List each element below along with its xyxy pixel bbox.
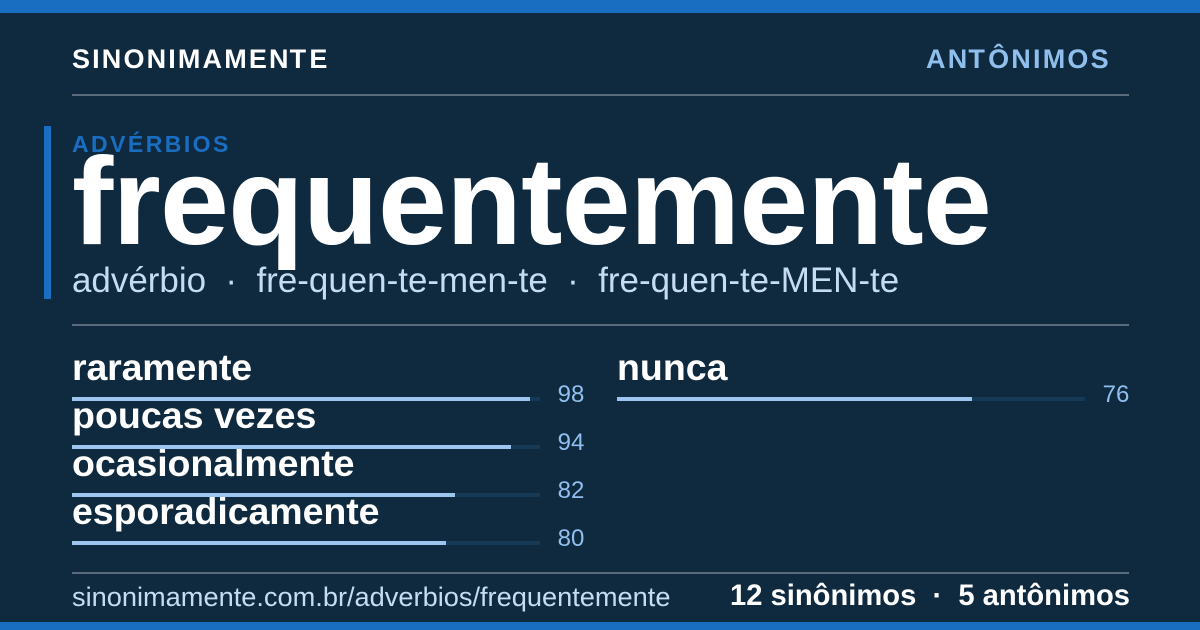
score value: 76 (1103, 381, 1129, 408)
score bar (72, 493, 540, 497)
category label: ADVÉRBIOS (72, 131, 231, 157)
pronunciation line: advérbio · fre-quen-te-men-te · fre-quen-te-MEN-te (72, 261, 899, 300)
score bar (72, 445, 540, 449)
score value: 80 (558, 525, 584, 552)
score value: 98 (558, 381, 584, 408)
score bar (617, 397, 1085, 401)
score bar (72, 541, 540, 545)
score bar (72, 397, 540, 401)
vertical accent bar (44, 126, 51, 299)
synonym: ocasionalmente (72, 442, 584, 504)
synonym: poucas vezes (72, 394, 584, 456)
footer counts: 12 sinônimos · 5 antônimos (730, 580, 1130, 612)
score value: 94 (558, 429, 584, 456)
antonym: nunca: nunca (617, 346, 727, 388)
synonym: raramente (72, 346, 584, 408)
antonym: nunca (617, 346, 1129, 408)
synonym: raramente: raramente (72, 346, 252, 388)
score value: 82 (558, 477, 584, 504)
synonym: esporadicamente (72, 490, 584, 552)
synonym: ocasionalmente: ocasionalmente (72, 442, 354, 484)
footer url: sinonimamente.com.br/adverbios/frequentemente (72, 581, 670, 612)
headword title: frequentemente (72, 133, 991, 271)
section label: antônimos: ANTÔNIMOS (926, 44, 1111, 74)
bottom accent bar (0, 622, 1200, 630)
top accent bar (0, 0, 1200, 13)
synonym: poucas vezes: poucas vezes (72, 394, 316, 436)
brand name: SINONIMAMENTE (72, 44, 329, 74)
synonym: esporadicamente: esporadicamente (72, 490, 379, 532)
